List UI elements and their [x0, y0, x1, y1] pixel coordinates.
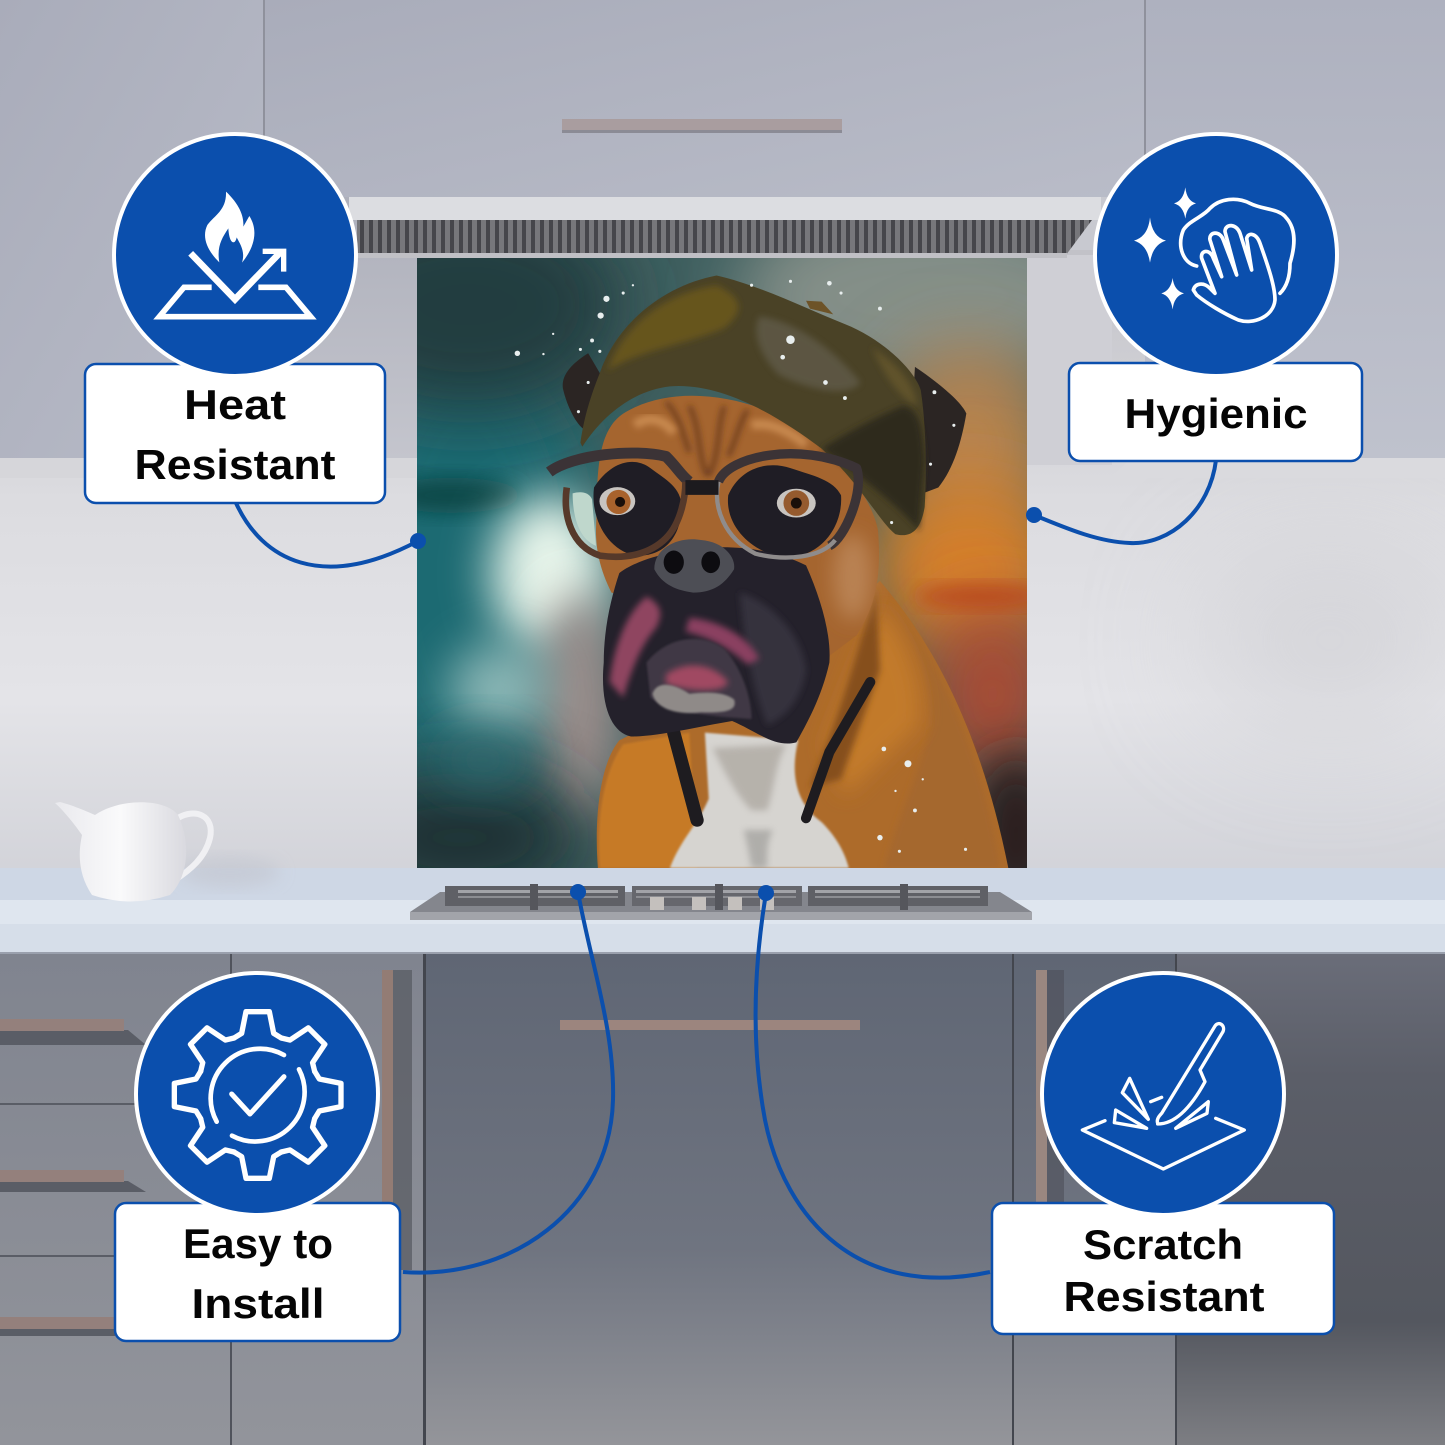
ears — [563, 353, 966, 499]
badge circle — [136, 973, 378, 1215]
connector: scratch resistant — [756, 885, 990, 1278]
icon: gear with check mark — [174, 1012, 341, 1178]
eyes — [599, 487, 816, 517]
connector: heat resistant — [236, 503, 426, 567]
icon: flame over surface with arrow — [159, 192, 311, 317]
callout: scratch resistant — [992, 973, 1334, 1334]
nose — [654, 539, 734, 593]
artwork panel: boxer dog in glasses and cap — [417, 258, 1027, 868]
label box — [1069, 363, 1362, 461]
callout: hygienic — [1069, 134, 1362, 461]
connector: easy to install — [403, 884, 613, 1273]
stove hob — [410, 884, 1032, 920]
callout: easy to install — [115, 973, 400, 1341]
label text — [134, 381, 336, 488]
badge circle — [1042, 973, 1284, 1215]
head fur — [596, 396, 879, 659]
connector: hygienic — [1026, 460, 1216, 543]
label box — [85, 364, 385, 503]
coat — [597, 581, 1008, 868]
icon: knife scratching a surface — [1082, 1024, 1244, 1169]
harness straps — [674, 682, 870, 820]
muzzle — [603, 547, 830, 744]
lower cabinets — [0, 954, 1445, 1445]
painting background — [417, 258, 1027, 868]
label box — [992, 1203, 1334, 1334]
label text: Easy to — [183, 1220, 333, 1267]
badge circle — [114, 134, 356, 376]
label text: Hygienic — [1124, 390, 1308, 437]
callout: heat resistant — [85, 134, 385, 503]
label text: Heat — [184, 381, 286, 428]
badge circle — [1095, 134, 1337, 376]
glasses — [549, 453, 858, 557]
label text: Resistant — [1064, 1273, 1265, 1320]
label text — [183, 1220, 333, 1327]
countertop — [0, 868, 1445, 954]
label text: Scratch — [1083, 1221, 1243, 1268]
label text — [1064, 1221, 1265, 1320]
icon: hand wiping with sparkles — [1134, 187, 1294, 321]
droplets and dust — [515, 280, 967, 853]
teapot — [55, 802, 280, 902]
white chest — [670, 733, 849, 868]
label text: Resistant — [134, 441, 336, 488]
cap — [580, 276, 926, 535]
label box — [115, 1203, 400, 1341]
eye patches — [593, 462, 841, 558]
label text: Install — [192, 1280, 324, 1327]
